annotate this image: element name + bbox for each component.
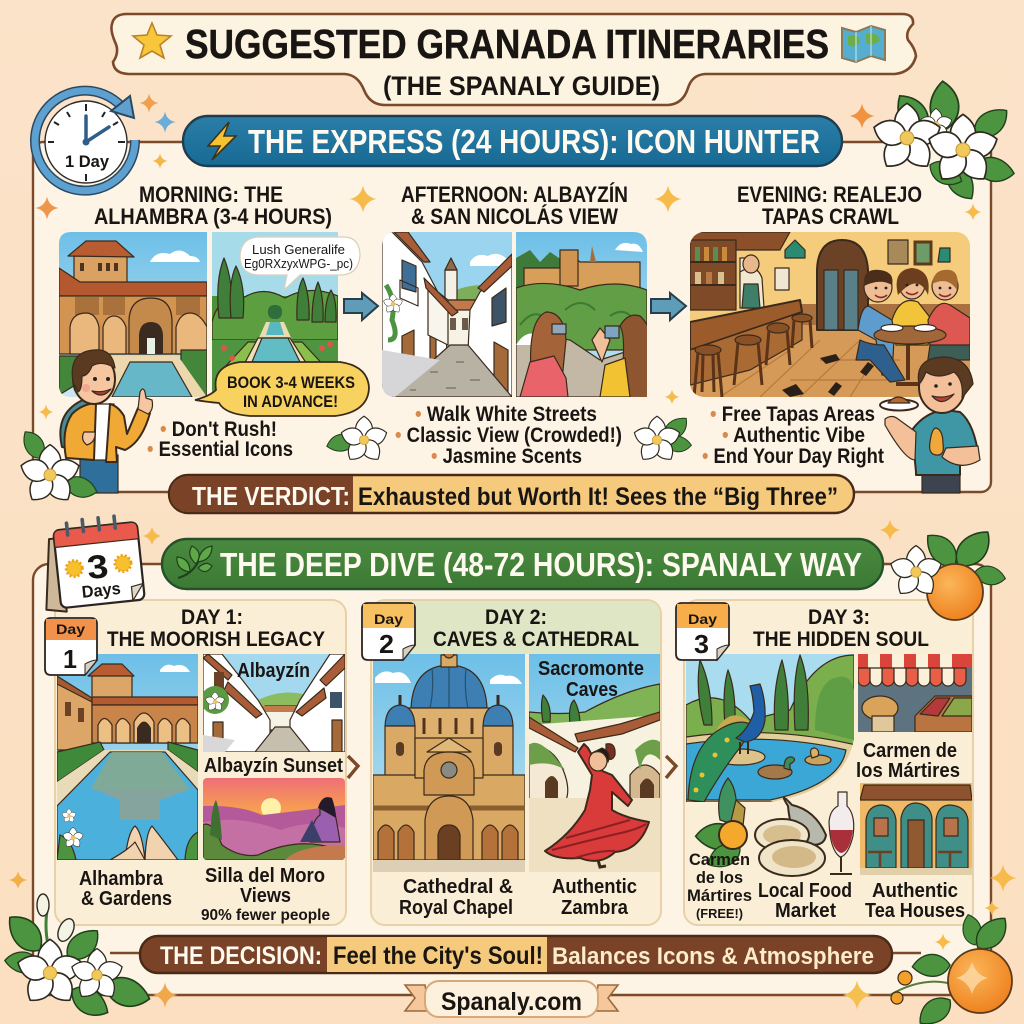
afternoon bullets: • Classic View (Crowded!) [395, 424, 622, 447]
illustration: albayzin street: Albayzín [237, 660, 310, 682]
evening bullets: • End Your Day Right [702, 445, 884, 468]
verdict label: THE VERDICT: [192, 481, 350, 511]
title text: SUGGESTED GRANADA ITINERARIES [185, 21, 829, 67]
illustration: alhambra and gardens [57, 654, 198, 860]
morning heading [94, 182, 332, 229]
day 1 heading [107, 606, 325, 651]
day 3 labels: Market [775, 900, 836, 922]
day 2 heading [433, 606, 639, 651]
illustration: sacromonte caves and zambra: Sacromonte [538, 658, 644, 680]
callout: lush generalife [240, 237, 360, 290]
morning bullets [147, 418, 293, 461]
day 3 labels [687, 850, 965, 922]
day 3 labels: Carmen [689, 850, 750, 869]
morning heading: MORNING: THE [139, 182, 283, 207]
afternoon bullets: • Jasmine Scents [431, 445, 582, 468]
day 1 heading: DAY 1: [181, 606, 243, 629]
illustration: sacromonte caves and zambra: Caves [566, 679, 618, 701]
icon: clock one day: 1 Day [65, 152, 110, 171]
deep dive heading banner [162, 539, 883, 589]
decision label: THE DECISION: [160, 942, 322, 970]
callout: book in advance [195, 362, 369, 416]
decoration: top right orange [888, 525, 1008, 620]
evening bullets: • Free Tapas Areas [710, 403, 875, 426]
illustration: sunset at silla del moro [203, 778, 345, 860]
subtitle: (THE SPANALY GUIDE) [383, 71, 660, 101]
panel: the express [33, 116, 991, 513]
day 1 badge: 1 [63, 644, 77, 674]
day 1 labels: & Gardens [81, 888, 172, 910]
day 2 labels: Cathedral & [403, 876, 513, 898]
illustration: backpacker pointing [60, 350, 152, 493]
illustration: white streets [382, 232, 512, 397]
column: morning [59, 182, 369, 493]
decision text: Balances Icons & Atmosphere [552, 943, 874, 970]
day 3 labels: Authentic [872, 880, 958, 902]
day 3 heading [753, 606, 929, 651]
icon: calendar three days [37, 514, 145, 614]
decision bar [140, 936, 892, 973]
arrow: day 1 to day 2 [348, 756, 358, 778]
evening bullets [702, 403, 884, 468]
column: evening [690, 182, 980, 493]
callout: lush generalife: Lush Generalife [252, 243, 345, 257]
illustration: citrus leaves [694, 778, 747, 871]
illustration: sacromonte caves and zambra [529, 654, 660, 872]
afternoon bullets: • Walk White Streets [415, 403, 597, 426]
verdict bar [169, 475, 854, 513]
icon: calendar three days: 3 [85, 547, 110, 586]
decision highlight: Feel the City's Soul! [333, 942, 543, 970]
express heading banner [183, 116, 842, 166]
morning bullets: • Don't Rush! [160, 418, 277, 441]
express title: THE EXPRESS (24 HOURS): ICON HUNTER [248, 123, 820, 160]
day 3 labels: Tea Houses [865, 900, 965, 922]
day 2 labels: Royal Chapel [399, 897, 513, 919]
day 1 labels: Views [240, 885, 291, 907]
verdict text: Exhausted but Worth It! Sees the “Big Three” [358, 483, 838, 511]
illustration: alhambra [59, 232, 207, 397]
decoration: flower one [326, 416, 389, 464]
day 3 heading: THE HIDDEN SOUL [753, 628, 929, 651]
day 2 heading: CAVES & CATHEDRAL [433, 628, 639, 651]
day 3 badge [676, 603, 729, 660]
day 3 badge: Day [688, 611, 717, 627]
illustration: peacock pond [686, 654, 856, 802]
day 1 labels [79, 865, 330, 924]
callout: book in advance: BOOK 3-4 WEEKS [227, 373, 355, 392]
icon: leaf sprig [177, 546, 212, 578]
decoration: left jasmine [18, 427, 100, 506]
illustration: albayzin street [201, 654, 345, 752]
illustration: tea house [860, 783, 972, 875]
decoration: bottom left jasmine [2, 894, 154, 1024]
icon: calendar three days: Days [81, 579, 122, 602]
evening heading: EVENING: REALEJO [737, 182, 922, 207]
icon: clock one day [35, 91, 135, 191]
day 3 labels: Mártires [687, 886, 752, 905]
decoration: top right jasmine [870, 80, 1017, 205]
morning heading: ALHAMBRA (3-4 HOURS) [94, 204, 332, 229]
day 1 badge [45, 618, 97, 675]
day 1 labels: 90% fewer people [201, 907, 330, 924]
illustration: generalife garden [212, 232, 338, 397]
day 3 labels: Local Food [758, 880, 852, 902]
day 2 badge: 2 [379, 629, 394, 659]
evening heading [737, 182, 922, 229]
day 1 labels: Silla del Moro [205, 865, 325, 887]
arrow: afternoon to evening [651, 293, 686, 320]
day 1 heading: THE MOORISH LEGACY [107, 628, 325, 651]
illustration: market stall [858, 654, 972, 732]
day 3 heading: DAY 3: [808, 606, 870, 629]
card: day 2 [362, 600, 661, 925]
afternoon heading [401, 182, 628, 229]
day 1 badge: Day [56, 621, 85, 637]
illustration: man with tapas [880, 357, 980, 493]
decoration: bottom right orange [890, 912, 1015, 1024]
day 3 badge: 3 [694, 629, 709, 659]
title banner [111, 14, 916, 105]
day 2 heading: DAY 2: [485, 606, 547, 629]
icon: lightning [208, 122, 236, 160]
day 3 labels: (FREE!) [696, 906, 743, 921]
website: Spanaly.com [441, 988, 582, 1016]
footer ribbon [405, 981, 618, 1017]
arrow: day 2 to day 3 [666, 756, 676, 778]
icon: map [842, 26, 885, 62]
afternoon heading: & SAN NICOLÁS VIEW [411, 204, 618, 229]
card: day 1 [45, 600, 346, 925]
afternoon heading: AFTERNOON: ALBAYZÍN [401, 182, 628, 207]
deep dive title: THE DEEP DIVE (48-72 HOURS): SPANALY WAY [220, 546, 862, 583]
day 2 labels [399, 876, 637, 919]
day 2 badge [362, 603, 415, 660]
illustration: oysters and wine [755, 792, 854, 876]
market label: los Mártires [856, 760, 960, 782]
callout: book in advance: IN ADVANCE! [243, 392, 338, 411]
column: afternoon [382, 182, 655, 468]
market label: Carmen de [863, 740, 957, 762]
illustration: cathedral and royal chapel [373, 648, 525, 872]
arrow: morning to afternoon [344, 293, 378, 320]
day 3 labels: de los [696, 868, 743, 887]
day 1 labels: Alhambra [79, 868, 164, 890]
market label [856, 740, 960, 782]
panel: the deep dive [33, 539, 991, 1017]
card: day 3 [676, 600, 973, 925]
albayzin sunset label: Albayzín Sunset [204, 755, 343, 777]
day 2 badge: Day [374, 611, 403, 627]
evening heading: TAPAS CRAWL [762, 204, 899, 229]
icon: star [133, 23, 171, 58]
morning bullets: • Essential Icons [147, 438, 293, 461]
callout: lush generalife: Eg0RXzyxWPG-_pc) [244, 257, 353, 271]
afternoon bullets [395, 403, 622, 468]
illustration: tapas bar [690, 232, 970, 397]
illustration: san nicolas view [516, 232, 647, 397]
day 2 labels: Zambra [561, 897, 629, 919]
evening bullets: • Authentic Vibe [722, 424, 865, 447]
day 2 labels: Authentic [552, 876, 637, 898]
decoration: flower two [632, 414, 693, 464]
